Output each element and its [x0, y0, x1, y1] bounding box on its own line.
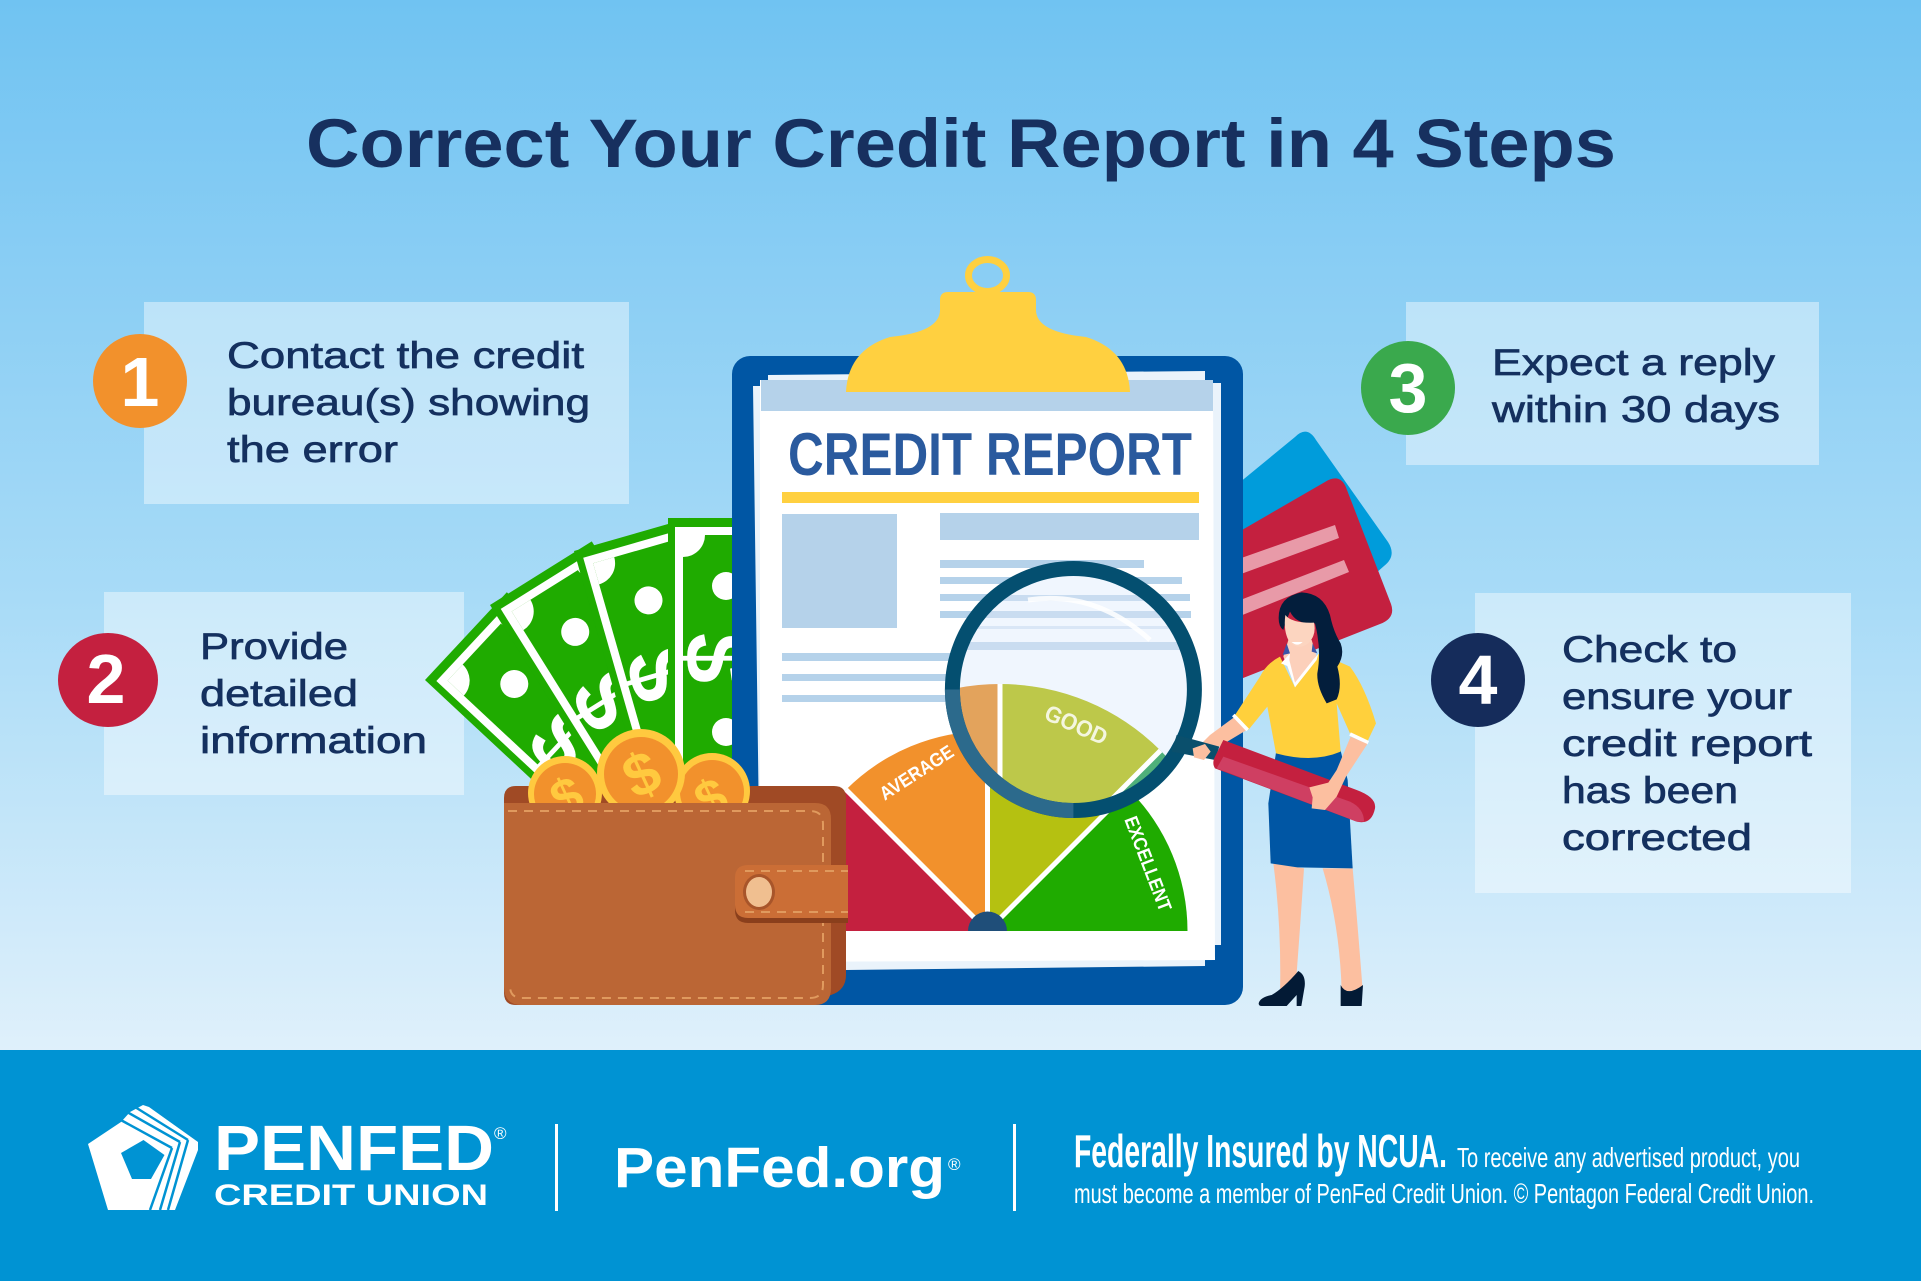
heading underline [782, 492, 1199, 503]
panel: step 2 [58, 592, 464, 795]
clipboard board [732, 356, 1243, 1005]
icon: gold coins: $ [686, 767, 737, 831]
clipboard [732, 260, 1243, 1005]
left hand [1193, 744, 1211, 760]
icon: gold coins: $ [612, 737, 671, 812]
step 4 number badge [1431, 633, 1525, 727]
woman left arm upper [1200, 717, 1247, 750]
placeholder photo block [782, 514, 897, 628]
paper sheets [753, 371, 1221, 970]
credit score gauge [788, 731, 1188, 931]
report heading: CREDIT REPORT [788, 421, 1192, 488]
step 2 text: Provide [200, 626, 348, 667]
website address: ® [948, 1155, 961, 1174]
magnifying glass lens [944, 561, 1202, 818]
credit score gauge: EXCELLENT [1119, 814, 1175, 915]
step 1 text: the error [227, 429, 398, 470]
woman shirt [1235, 654, 1376, 758]
icon: gold coins: $ [542, 765, 593, 830]
woman legs [1273, 863, 1363, 995]
woman neck [1283, 640, 1317, 687]
PenFed wordmark: PENFED [214, 1112, 494, 1184]
icon: fan of green banknotes [425, 518, 732, 779]
step 1 text [227, 335, 590, 470]
step 2 text [200, 626, 427, 761]
step 2 text: information [200, 720, 427, 761]
legal disclaimer [1074, 1125, 1814, 1209]
woman holding magnifying glass [1172, 592, 1376, 1006]
footer band [0, 1050, 1921, 1281]
yellow clip [846, 292, 1130, 392]
icon: credit cards behind clipboard [1190, 432, 1392, 695]
icon: fan of green banknotes: $ [604, 636, 714, 712]
step 4 text: ensure your [1562, 676, 1792, 717]
step 1 number badge: 1 [121, 343, 159, 421]
woman shoes [1259, 971, 1363, 1006]
step 2 number badge: 2 [87, 640, 125, 718]
panel: step 3 [1361, 302, 1819, 465]
divider 2 [1013, 1124, 1016, 1211]
icon: gold coins [528, 729, 750, 803]
magnifier neck [1172, 735, 1219, 760]
PenFed logo mark [88, 1105, 198, 1210]
step 1 number badge [93, 334, 187, 428]
magnifying glass lens: GOOD [1041, 699, 1112, 750]
step 1 text: Contact the credit [227, 335, 585, 376]
PenFed wordmark [214, 1112, 507, 1212]
divider 1 [555, 1124, 558, 1211]
step 3 number badge: 3 [1389, 349, 1427, 427]
woman hair [1279, 592, 1342, 703]
woman skirt [1268, 751, 1353, 868]
wallet back panel [504, 786, 846, 1005]
step 3 text [1491, 342, 1780, 430]
step 4 text: has been [1562, 770, 1738, 811]
website address: PenFed.org [614, 1136, 945, 1200]
icon: fan of green banknotes: $ [550, 652, 662, 748]
icon: fan of green banknotes: $ [509, 688, 614, 795]
icon: fan of green banknotes: $ [666, 633, 766, 683]
title: Correct Your Credit Report in 4 Steps [306, 105, 1616, 182]
icon: wallet front [504, 803, 848, 1005]
step 4 number badge: 4 [1459, 641, 1498, 719]
step 3 number badge [1361, 341, 1455, 435]
magnifier red handle [1213, 740, 1375, 822]
credit score gauge: AVERAGE [876, 742, 958, 805]
right forearm and hand [1309, 737, 1367, 810]
woman earrings [1283, 643, 1317, 655]
PenFed wordmark: ® [494, 1124, 507, 1143]
step 2 number badge [58, 633, 158, 727]
panel: step 1 [93, 302, 629, 504]
woman smile [1292, 642, 1303, 645]
step 2 text: detailed [200, 673, 358, 714]
woman face [1285, 615, 1315, 647]
step 3 text: within 30 days [1491, 389, 1780, 430]
clip ring [968, 260, 1006, 292]
wallet strap [735, 865, 848, 923]
panel: step 4 [1431, 593, 1851, 893]
placeholder text lines [782, 513, 1199, 702]
step 4 text [1562, 629, 1813, 858]
legal disclaimer: Federally Insured by NCUA. [1074, 1125, 1447, 1177]
step 4 text: credit report [1562, 723, 1813, 764]
step 3 text: Expect a reply [1492, 342, 1776, 383]
PenFed wordmark: CREDIT UNION [214, 1179, 488, 1212]
step 1 text: bureau(s) showing [227, 382, 590, 423]
woman cuffs and collar [1233, 715, 1368, 743]
step 4 text: Check to [1562, 629, 1737, 670]
step 4 text: corrected [1562, 817, 1752, 858]
